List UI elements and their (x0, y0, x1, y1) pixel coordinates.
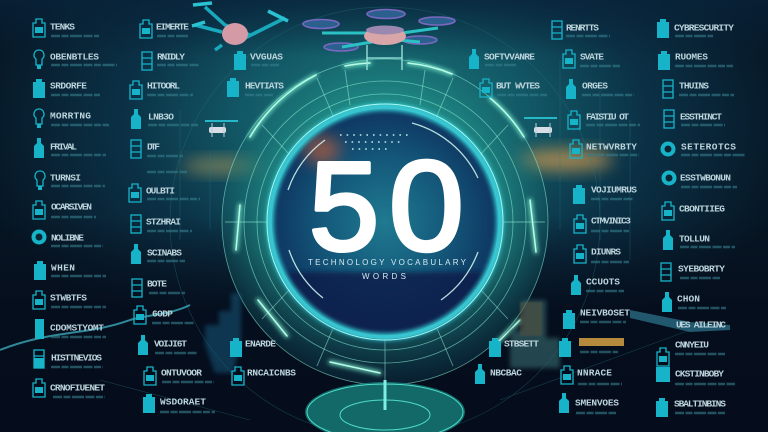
item (227, 78, 284, 97)
item (34, 138, 106, 158)
faint side grid (100, 7, 690, 432)
item: CYBRESCURITY (674, 22, 734, 34)
horizon glow right (517, 149, 613, 171)
item (131, 109, 198, 129)
outer band (222, 59, 548, 385)
item (144, 367, 214, 385)
item (131, 140, 183, 158)
item: SETEROTCS (681, 142, 736, 152)
outer band lower shade (222, 59, 548, 385)
right column 2 (656, 19, 746, 417)
item (571, 275, 624, 295)
item (561, 366, 622, 384)
item (662, 170, 737, 187)
title number 50: 0 (389, 134, 464, 277)
inner disc lower dark (282, 272, 488, 340)
item: RUOMES (675, 52, 708, 62)
item: NOLIBNE (51, 232, 84, 244)
radial segment dividers (225, 70, 545, 384)
item: VOJIUMRUS (591, 184, 637, 196)
item (568, 111, 640, 129)
outer thin rings (222, 59, 548, 385)
item: SRDORFE (50, 80, 87, 92)
item: CKSTINBOBY (675, 368, 724, 380)
item (475, 364, 522, 384)
item: ONTUVOOR (161, 368, 202, 378)
drone: top centre (303, 10, 455, 70)
drone: top left (192, 3, 288, 50)
item: VOIJI6T (154, 338, 187, 350)
dotted map (340, 135, 410, 149)
item: ENARDE (245, 338, 276, 350)
item: CTMVINIC3 (591, 216, 631, 226)
drone: small right (524, 118, 557, 137)
item: SCINABS (147, 248, 182, 258)
city silhouette right (510, 300, 560, 368)
item (143, 394, 215, 413)
item (563, 50, 620, 68)
item: EIMERTE (156, 22, 189, 32)
title number 50 (309, 134, 464, 277)
light streak right (630, 310, 730, 332)
item (574, 215, 631, 233)
item (656, 398, 726, 417)
item (134, 306, 194, 324)
left column 1 (32, 19, 117, 397)
item: SVATE (580, 52, 604, 62)
city silhouette left (205, 293, 241, 373)
orange label (579, 338, 624, 346)
item (661, 263, 725, 281)
item: CHON (677, 294, 700, 304)
dial: concentric ring (222, 59, 548, 385)
item: RNCAICNBS (247, 368, 296, 378)
item: LNB3O (148, 112, 174, 122)
item: FAISTIU OT (586, 112, 629, 122)
item: THUINS (679, 80, 709, 92)
item (234, 51, 283, 70)
item: SOFTVVANRE (484, 52, 535, 62)
item: CNNYEIU (675, 340, 709, 350)
item: TOLLUN (679, 234, 710, 244)
item (33, 291, 106, 309)
item (566, 79, 634, 99)
item: ESSTHINCT (680, 112, 722, 122)
item (570, 140, 639, 158)
item: RNIDLY (157, 52, 185, 62)
item: STZHRAI (146, 216, 181, 228)
item (140, 20, 189, 38)
item (656, 367, 735, 384)
item (480, 79, 547, 97)
item (574, 245, 629, 263)
item (552, 21, 610, 39)
item: WSDORAET (160, 396, 206, 408)
item (657, 340, 725, 366)
item: BUT WVTES (496, 80, 540, 92)
item (658, 51, 733, 70)
item (34, 109, 109, 128)
item (34, 261, 106, 280)
item (573, 184, 637, 204)
item: DIUNRS (591, 246, 621, 258)
left column 2 (129, 20, 215, 413)
platform (305, 380, 465, 432)
item: HISTTNEVIOS (51, 352, 102, 364)
item: NETWVRBTY (586, 142, 637, 152)
item (662, 292, 726, 312)
item (662, 202, 725, 220)
item (469, 49, 535, 69)
item: VVGUAS (250, 52, 283, 62)
item: CRNOFIUENET (50, 382, 105, 394)
item: STBSETT (504, 338, 539, 350)
item: 6ODP (152, 308, 173, 320)
item (142, 52, 200, 70)
drone: small left (205, 121, 238, 137)
item: SMENVOES (575, 398, 619, 408)
item: CCUOTS (586, 276, 620, 288)
item: HEVTIATS (245, 80, 284, 92)
inner disc (270, 107, 500, 337)
item (34, 350, 103, 368)
item: STWBTFS (50, 292, 87, 304)
item: OULBTI (146, 186, 175, 196)
item (664, 110, 725, 128)
right column 1 (552, 21, 640, 413)
neon arcs (236, 63, 536, 373)
item: CDOMSTYOMT (50, 322, 104, 334)
item (131, 244, 185, 264)
item (563, 308, 630, 329)
line item (147, 171, 187, 173)
item (129, 184, 200, 202)
item (232, 367, 296, 385)
item (230, 338, 276, 357)
item: HITOORL (147, 80, 180, 92)
inner left labels (227, 51, 296, 385)
item: WHEN (51, 262, 75, 274)
item: NBCBAC (490, 368, 522, 378)
item: MORRTNG (50, 110, 91, 122)
item (131, 215, 192, 233)
item: DTF (147, 142, 160, 152)
item: FRIVAL (50, 142, 77, 152)
item: BOTE (147, 278, 167, 290)
title number 50: 5 (309, 136, 379, 277)
item (33, 201, 96, 219)
item (33, 79, 100, 98)
item: UES AILEINC (676, 320, 726, 330)
light streak left (0, 305, 190, 350)
inner right labels (469, 49, 547, 384)
item: NNRACE (577, 368, 612, 378)
item (489, 338, 539, 357)
neon arc glow (236, 63, 536, 373)
subtitle: WORDS (362, 272, 406, 281)
item: OCARSIVEN (51, 202, 92, 212)
orange patch in disc (304, 136, 340, 164)
item: SYEBOBRTY (678, 264, 725, 274)
item (35, 319, 106, 339)
item (130, 80, 193, 99)
item (138, 335, 197, 355)
item: CBONTIIEG (679, 204, 725, 214)
subtitle (308, 258, 467, 281)
item (660, 142, 746, 156)
item: ORGES (582, 80, 608, 92)
item (657, 19, 734, 38)
item (35, 171, 105, 190)
item (33, 19, 99, 37)
inner white arcs (288, 123, 478, 300)
item: RENRTTS (566, 22, 599, 34)
item (663, 230, 735, 250)
item (132, 278, 185, 297)
item: SBALTINBINS (674, 398, 726, 410)
item: TURNSI (50, 172, 81, 184)
item (663, 80, 734, 98)
horizon glow left (182, 158, 262, 174)
item (34, 50, 117, 69)
inner glowing ring (270, 107, 500, 337)
item (32, 230, 103, 246)
item (33, 379, 105, 397)
item: NEIVBOSET (580, 308, 630, 318)
item: ESSTWBONUN (680, 172, 731, 184)
item: OBENBTLES (50, 52, 99, 62)
subtitle: TECHNOLOGY VOCABULARY (308, 258, 467, 267)
item (559, 393, 619, 413)
item (559, 338, 618, 357)
item: TENKS (50, 22, 75, 32)
